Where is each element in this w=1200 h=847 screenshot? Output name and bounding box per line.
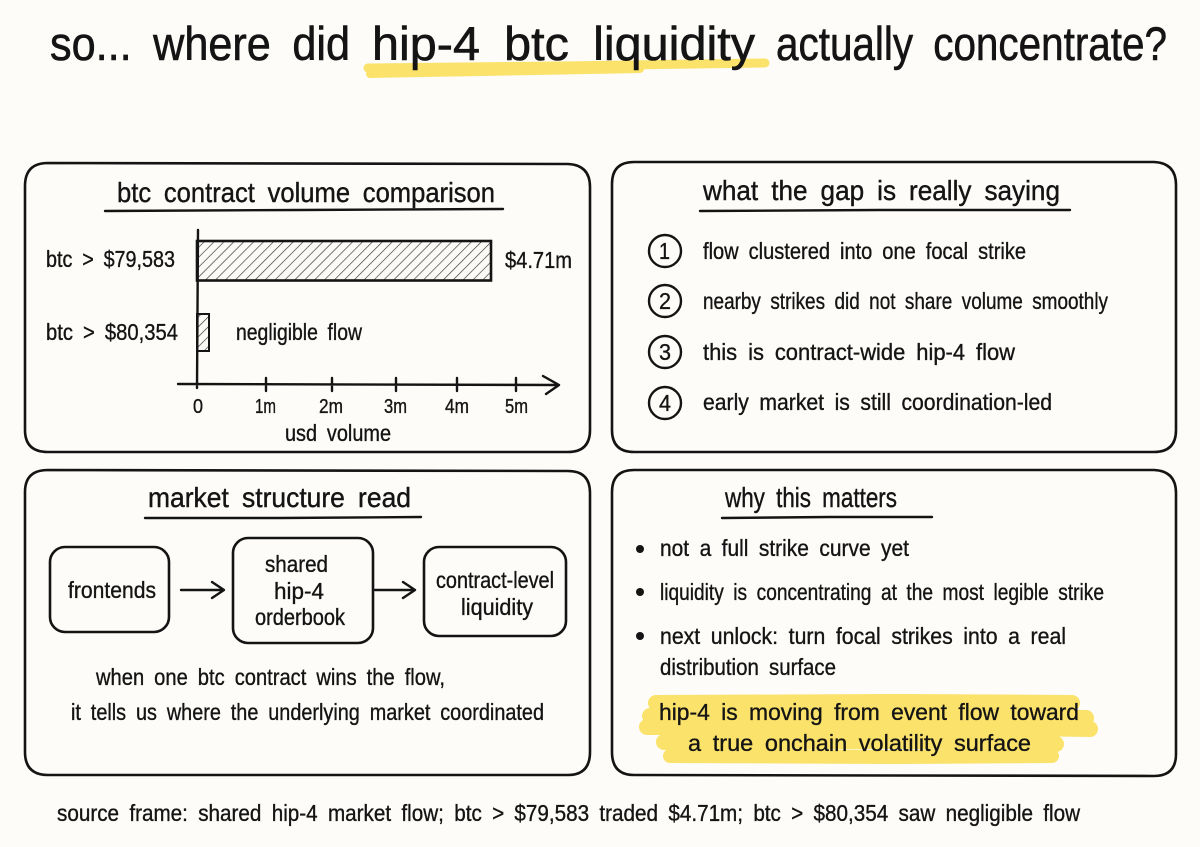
box: shared hip-4 orderbook (233, 538, 373, 643)
panel: market structure read (25, 470, 590, 775)
bullet 3: distribution surface (660, 654, 836, 680)
panel: btc contract volume comparison (25, 163, 590, 452)
list item 2 (649, 285, 1108, 317)
box: contract-level liquidity: contract-level (436, 567, 554, 593)
bullet 1: not a full strike curve yet (660, 535, 910, 561)
axis tick labels: 3m (384, 396, 407, 418)
bullet 2: liquidity is concentrating at the most legible strike (660, 579, 1104, 605)
source footnote: source frame: shared hip-4 market flow; btc > $79,583 traded $4.71m; btc > $80,354 saw negligible flow (57, 800, 1080, 826)
bar chart (46, 230, 572, 446)
heading: volume comparison: btc contract volume comparison (117, 177, 495, 208)
title: hip-4 btc liquidity (372, 17, 756, 70)
label: btc above 80,354: btc > $80,354 (46, 319, 178, 345)
list item 1: 1 (659, 238, 670, 264)
list item 3 (649, 336, 1015, 368)
box: contract-level liquidity: liquidity (461, 594, 533, 620)
box: shared hip-4 orderbook: hip-4 (274, 578, 324, 604)
list item 4: early market is still coordination-led (703, 389, 1052, 415)
heading: market structure read: market structure read (148, 482, 411, 513)
box: frontends: frontends (68, 577, 156, 603)
title highlight (368, 63, 765, 74)
value: 4.71m: $4.71m (505, 247, 572, 273)
axis tick labels (193, 396, 528, 418)
caption: it tells us where the underlying market coordinated (71, 699, 544, 725)
axis tick labels: 5m (505, 396, 528, 418)
axis tick labels: 1m (255, 396, 276, 418)
box: shared hip-4 orderbook: orderbook (255, 604, 345, 630)
list item 4 (649, 387, 1052, 419)
title: so... where did (50, 17, 350, 70)
bar: btc above 79,583 (197, 241, 491, 280)
axis tick labels: 2m (319, 396, 343, 418)
list item 3: 3 (659, 339, 671, 365)
chart axes (178, 230, 559, 394)
title (50, 17, 1167, 74)
list item 1 (649, 235, 1026, 267)
list item 2: 2 (659, 288, 671, 314)
list item 1: flow clustered into one focal strike (703, 238, 1026, 264)
box: contract-level liquidity (424, 547, 566, 636)
heading: why this matters: why this matters (724, 482, 897, 513)
value: negligible flow: negligible flow (236, 319, 362, 345)
box: frontends (50, 547, 169, 632)
axis tick labels: 4m (445, 396, 469, 418)
highlighted takeaway: a true onchain volatility surface (688, 730, 1031, 756)
list item 2: nearby strikes did not share volume smoothly (703, 288, 1108, 314)
bar: btc above 80,354 (197, 314, 209, 351)
axis title: usd volume (285, 420, 391, 446)
panel: what the gap is really saying (612, 162, 1176, 452)
caption (71, 664, 544, 725)
bullet 3 (636, 623, 1066, 680)
box: shared hip-4 orderbook: shared (265, 551, 328, 577)
arrow: orderbook to liquidity (375, 582, 415, 598)
caption: when one btc contract wins the flow, (95, 664, 445, 690)
bullet 3: next unlock: turn focal strikes into a real (660, 623, 1066, 649)
highlighted takeaway: hip-4 is moving from event flow toward (659, 699, 1079, 725)
highlighted takeaway (647, 699, 1090, 757)
label: btc above 79,583: btc > $79,583 (46, 246, 175, 272)
axis tick labels: 0 (193, 396, 203, 418)
arrow: frontends to orderbook (181, 582, 224, 598)
panel: why this matters (612, 470, 1176, 776)
list item 3: this is contract-wide hip-4 flow (703, 339, 1015, 365)
heading: what the gap is really saying: what the gap is really saying (702, 175, 1060, 206)
list item 4: 4 (659, 390, 671, 416)
flow diagram (50, 538, 566, 643)
